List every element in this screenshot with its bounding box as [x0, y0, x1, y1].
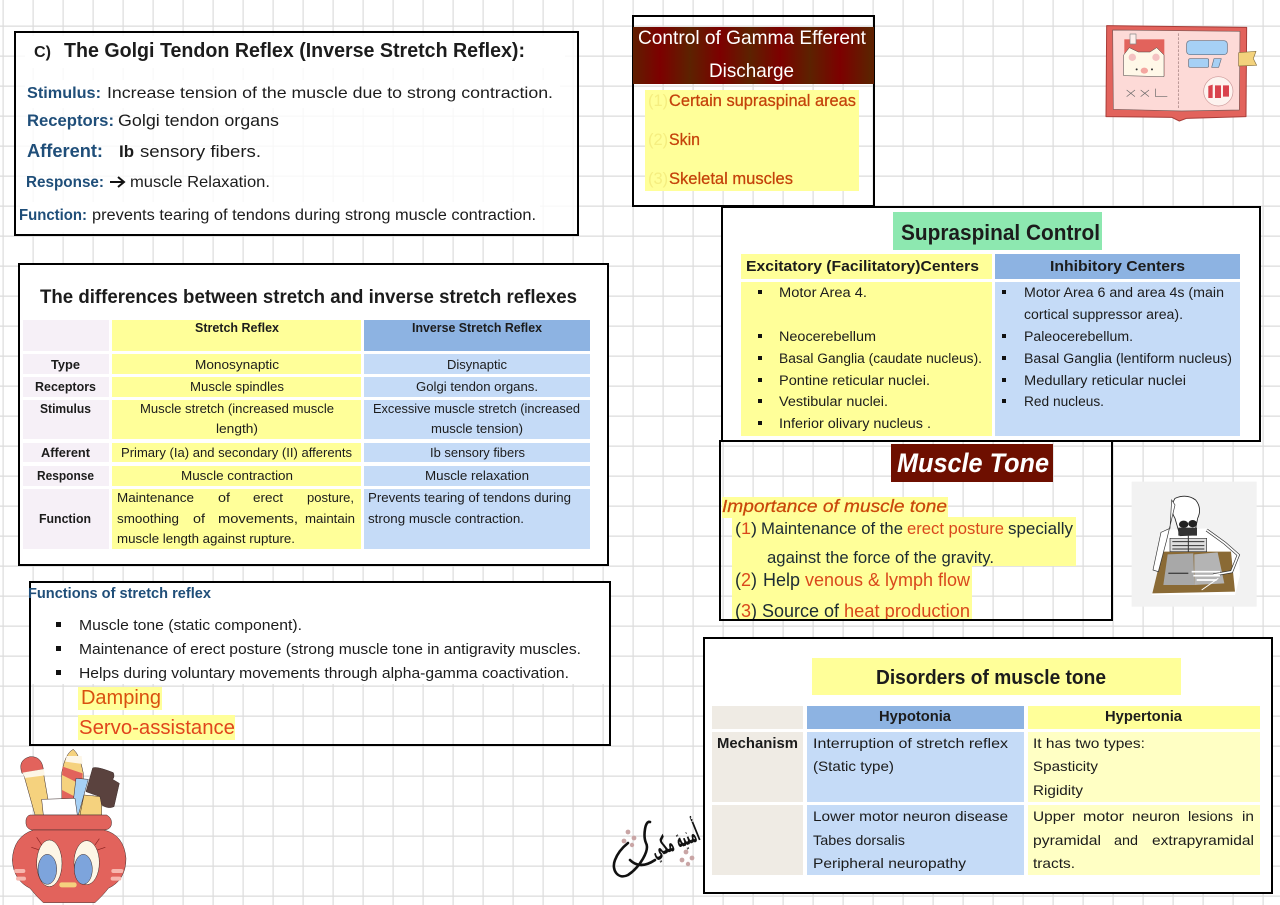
panel: differences table [19, 264, 608, 565]
text: receptors: Receptors: [27, 111, 114, 130]
table: hypotonia vs hypertonia: Peripheral neuropathy [813, 855, 966, 871]
table: hypotonia vs hypertonia: motor [1083, 808, 1124, 824]
table: stretch vs inverse stretch: of [193, 512, 206, 526]
heading: gamma efferent: Control of Gamma Efferent [638, 27, 867, 49]
table: stretch vs inverse stretch: Disynaptic [447, 358, 507, 372]
column: inhibitory centers: Paleocerebellum. [1024, 329, 1133, 344]
table: stretch vs inverse stretch: Primary (Ia) and secondary (II) afferents [121, 446, 352, 460]
text: afferent: sensory fibers. [140, 142, 261, 161]
text: response [26, 174, 270, 191]
text: response: Response: [26, 174, 104, 191]
column: inhibitory centers [995, 254, 1240, 436]
table: stretch vs inverse stretch: Function [39, 512, 91, 526]
table: stretch vs inverse stretch: erect [253, 491, 284, 505]
column: excitatory centers: Inferior olivary nucleus . [779, 416, 931, 431]
heading: gamma efferent [633, 27, 874, 84]
table: hypotonia vs hypertonia: Interruption of stretch reflex [813, 735, 1008, 751]
table: stretch vs inverse stretch: Stretch Reflex [195, 321, 279, 335]
table: hypotonia vs hypertonia: lesions [1188, 808, 1233, 824]
column: inhibitory centers: Inhibitory Centers [1050, 258, 1185, 275]
text: function: prevents tearing of tendons during strong muscle contraction. [92, 207, 536, 224]
text: afferent: Ib [119, 142, 134, 161]
table: stretch vs inverse stretch [23, 320, 590, 549]
heading: Golgi tendon reflex: C) [34, 44, 51, 61]
table: stretch vs inverse stretch: Inverse Stretch Reflex [412, 321, 542, 335]
table: stretch vs inverse stretch: Receptors [35, 380, 96, 394]
list: importance items: (3) [735, 601, 757, 621]
signature [614, 815, 704, 876]
list: gamma sources: (3) [648, 170, 668, 188]
list: importance items: heat production [844, 601, 970, 621]
table: stretch vs inverse stretch: posture, [307, 491, 354, 505]
table: stretch vs inverse stretch: Golgi tendon organs. [416, 380, 538, 394]
column: excitatory centers: Vestibular nuclei. [779, 394, 888, 409]
table: hypotonia vs hypertonia: extrapyramidal [1152, 832, 1254, 848]
text: أمنية مكي [645, 815, 704, 864]
table: stretch vs inverse stretch: movements, [218, 512, 298, 526]
table: hypotonia vs hypertonia [712, 706, 1260, 875]
table: hypotonia vs hypertonia: Hypertonia [1105, 709, 1183, 725]
column: excitatory centers: Neocerebellum [779, 329, 876, 344]
column: inhibitory centers: Medullary reticular nuclei [1024, 373, 1186, 388]
table: stretch vs inverse stretch: Maintenance [117, 491, 194, 505]
table: hypotonia vs hypertonia: (Static type) [813, 758, 894, 774]
column: inhibitory centers: Motor Area 6 and area 4s (main [1024, 285, 1224, 300]
column: excitatory centers: Excitatory (Facilitatory)Centers [746, 258, 979, 275]
table: stretch vs inverse stretch: muscle length against rupture. [117, 532, 295, 546]
list: gamma sources: Skeletal muscles [669, 170, 793, 188]
icon: skeleton reading a book [1132, 482, 1257, 607]
table: hypotonia vs hypertonia: in [1242, 808, 1254, 824]
list: gamma sources: (2) [648, 131, 668, 149]
table: hypotonia vs hypertonia: Mechanism [717, 736, 798, 752]
text: receptors: Golgi tendon organs [118, 111, 279, 130]
table: stretch vs inverse stretch: Muscle contraction [181, 469, 293, 483]
panel: supraspinal control [722, 207, 1260, 441]
heading: muscle tone: Muscle Tone [897, 448, 1049, 478]
heading: differences: The differences between stretch and inverse stretch reflexes [40, 287, 577, 308]
table: stretch vs inverse stretch: Afferent [41, 446, 91, 460]
column: inhibitory centers: cortical suppressor area). [1024, 307, 1183, 322]
list: importance items: Source of [762, 601, 840, 621]
list: functions [56, 617, 581, 682]
text: stimulus: Increase tension of the muscle due to strong contraction. [107, 85, 553, 102]
callout: servo-assistance: Servo-assistance [79, 717, 235, 739]
list: importance items: specially [1008, 520, 1074, 538]
table: stretch vs inverse stretch: Monosynaptic [195, 358, 279, 372]
list: gamma sources: (1) [648, 92, 668, 110]
heading: gamma efferent: Discharge [709, 60, 794, 82]
panel: disorders of muscle tone [704, 638, 1272, 893]
panel: muscle tone [720, 441, 1112, 621]
table: hypotonia vs hypertonia: and [1114, 832, 1138, 848]
list: importance items: Help [763, 570, 800, 590]
column: excitatory centers: Pontine reticular nuclei. [779, 373, 930, 388]
table: hypotonia vs hypertonia: Tabes dorsalis [813, 832, 905, 848]
list: importance items [732, 517, 1076, 621]
text: receptors [27, 111, 279, 130]
table: hypotonia vs hypertonia: Hypotonia [879, 709, 952, 725]
table: hypotonia vs hypertonia: neuron [1132, 808, 1180, 824]
column: excitatory centers: Basal Ganglia (caudate nucleus). [779, 351, 982, 366]
subheading: importance of muscle tone: Importance of muscle tone [722, 496, 947, 516]
text: function: Function: [19, 207, 87, 224]
list: importance items: erect posture [907, 520, 1004, 538]
text: stimulus: Stimulus: [27, 85, 101, 102]
list: gamma sources [645, 90, 859, 191]
heading: disorders: Disorders of muscle tone [876, 667, 1106, 689]
panel: control of gamma efferent discharge [633, 16, 874, 206]
heading: functions of stretch reflex: Functions of stretch reflex [28, 585, 212, 602]
table: stretch vs inverse stretch: length) [216, 422, 258, 436]
table: stretch vs inverse stretch: Response [37, 469, 94, 483]
column: inhibitory centers: Basal Ganglia (lentiform nucleus) [1024, 351, 1232, 366]
table: stretch vs inverse stretch: strong muscle contraction. [368, 512, 524, 526]
list: functions: Muscle tone (static component). [79, 617, 302, 634]
table: stretch vs inverse stretch: Stimulus [40, 402, 91, 416]
column: excitatory centers: Motor Area 4. [779, 285, 867, 300]
table: hypotonia vs hypertonia: It has two types: [1033, 735, 1145, 751]
text: response: muscle Relaxation. [130, 174, 270, 191]
table: stretch vs inverse stretch: Type [51, 358, 80, 372]
list: importance items: (2) [735, 570, 757, 590]
heading: supraspinal control: Supraspinal Control [901, 220, 1100, 245]
table: stretch vs inverse stretch: Muscle relaxation [425, 469, 529, 483]
table: stretch vs inverse stretch: Excessive muscle stretch (increased [373, 402, 580, 416]
heading: Golgi tendon reflex: The Golgi Tendon Reflex (Inverse Stretch Reflex): [64, 40, 525, 62]
list: importance items: against the force of the gravity. [767, 549, 994, 567]
table: hypotonia vs hypertonia: tracts. [1033, 855, 1075, 871]
icon: pink notebook [1106, 26, 1257, 121]
column: inhibitory centers: Red nucleus. [1024, 394, 1104, 409]
table: hypotonia vs hypertonia: Upper [1033, 808, 1075, 824]
list: importance items: (1) [735, 520, 757, 538]
table: stretch vs inverse stretch: maintain [305, 512, 355, 526]
list: gamma sources: Certain supraspinal areas [669, 92, 856, 110]
table: stretch vs inverse stretch: of [218, 491, 231, 505]
text: afferent [27, 141, 261, 161]
table: stretch vs inverse stretch: Prevents tearing of tendons during [368, 491, 571, 505]
icon: pencil pot [12, 749, 126, 903]
table: hypotonia vs hypertonia: Rigidity [1033, 782, 1083, 798]
heading: disorders [812, 658, 1181, 695]
heading: supraspinal control [893, 212, 1102, 250]
panel: Golgi tendon reflex [15, 32, 578, 235]
table: stretch vs inverse stretch: Muscle spindles [190, 380, 284, 394]
table: hypotonia vs hypertonia: Spasticity [1033, 758, 1098, 774]
table: stretch vs inverse stretch: muscle tension) [431, 422, 523, 436]
table: hypotonia vs hypertonia: Lower motor neuron disease [813, 808, 1008, 824]
list: importance items: venous & lymph flow [805, 570, 971, 590]
text: afferent: Afferent: [27, 141, 103, 161]
table: stretch vs inverse stretch: Muscle stretch (increased muscle [140, 402, 334, 416]
list: functions: Maintenance of erect posture (strong muscle tone in antigravity muscles. [79, 641, 581, 658]
table: stretch vs inverse stretch: smoothing [117, 512, 179, 526]
table: stretch vs inverse stretch: Ib sensory fibers [430, 446, 525, 460]
table: hypotonia vs hypertonia: pyramidal [1033, 832, 1101, 848]
column: excitatory centers [741, 254, 992, 436]
list: functions: Helps during voluntary movements through alpha-gamma coactivation. [79, 665, 569, 682]
panel: functions of stretch reflex [28, 582, 610, 745]
callout: damping: Damping [81, 687, 161, 709]
list: importance items: Maintenance of the [761, 520, 903, 538]
list: gamma sources: Skin [669, 131, 700, 149]
